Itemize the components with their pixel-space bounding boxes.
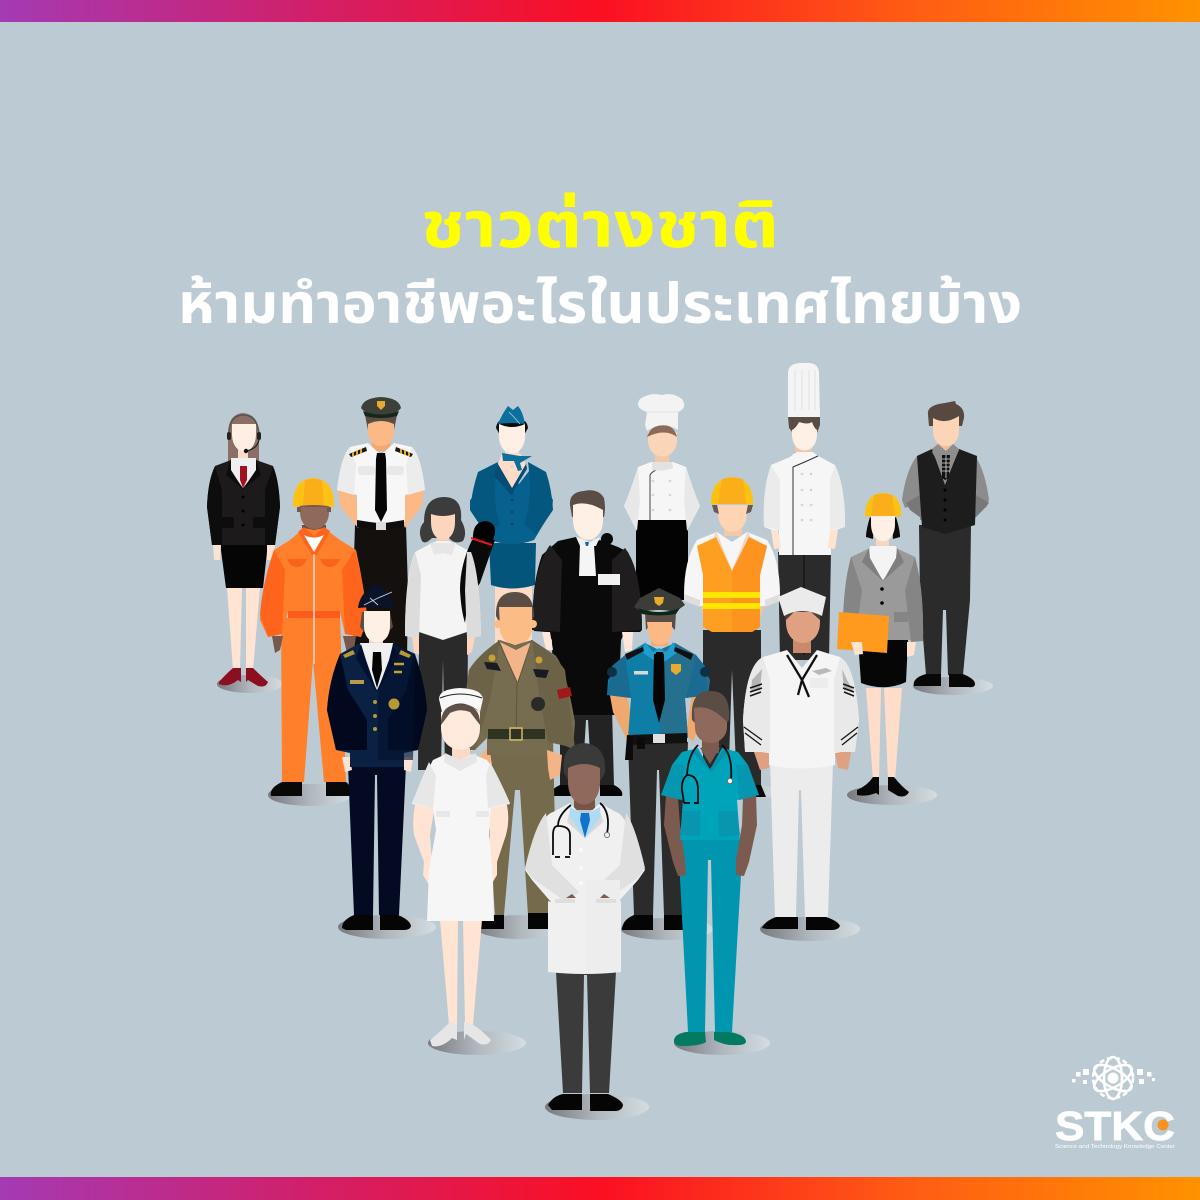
figure: nurse <box>412 688 526 1055</box>
figure: head chef <box>764 363 845 660</box>
logo: STKC <box>1055 1057 1175 1150</box>
figure: flight attendant <box>470 406 553 655</box>
figure: reporter with microphone <box>405 497 495 770</box>
figure: waiter in vest <box>902 401 993 695</box>
figure: call-centre woman <box>207 413 283 693</box>
logo: STKC: STKC <box>1055 1103 1175 1149</box>
microphone with cable <box>460 540 495 623</box>
figure: sailor <box>743 587 860 941</box>
figure: military officer <box>463 592 575 939</box>
figure: office woman with folder <box>837 493 937 805</box>
figure: air force officer <box>327 584 436 939</box>
figure: engineer in safety vest <box>684 477 780 800</box>
title: ชาวต่างชาติ <box>421 189 779 261</box>
figure: airline pilot <box>337 397 425 660</box>
reporter sleeve <box>465 552 481 638</box>
logo: STKC: Science and Technology Knowledge Center <box>1055 1144 1175 1150</box>
figure: nurse in teal scrubs <box>661 691 770 1055</box>
figure: police officer <box>607 588 713 940</box>
bottom gradient bar <box>0 1177 1200 1200</box>
figure: doctor <box>525 743 649 1120</box>
figure: orange jumpsuit worker <box>260 478 367 806</box>
title <box>178 189 1022 335</box>
top gradient bar <box>0 0 1200 22</box>
title: ห้ามทำอาชีพอะไรในประเทศไทยบ้าง <box>178 272 1022 335</box>
figure: judge in robe <box>532 490 642 796</box>
figure: woman chef <box>624 394 700 600</box>
